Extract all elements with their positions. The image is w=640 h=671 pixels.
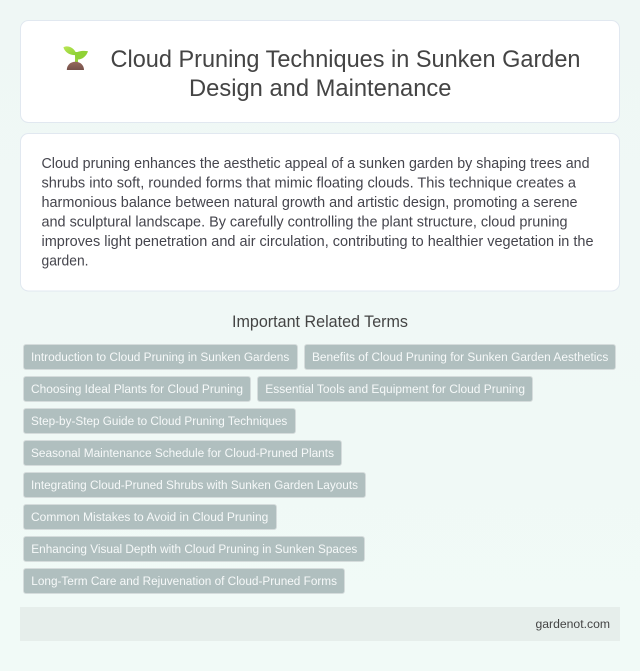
tag: mistakes: Common Mistakes to Avoid in Cloud Pruning	[31, 510, 268, 524]
tag: choosing plants	[24, 376, 250, 402]
footer	[20, 607, 620, 641]
heading: related terms: Important Related Terms	[232, 313, 408, 331]
panel: title card	[20, 20, 620, 122]
tag: visual depth	[24, 536, 364, 562]
tag: choosing plants: Choosing Ideal Plants for Cloud Pruning	[31, 382, 243, 396]
tag: step-by-step	[24, 408, 296, 434]
footer: site name: gardenot.com	[536, 617, 610, 631]
icon: seedling	[63, 46, 88, 70]
title: Design and Maintenance	[189, 75, 452, 102]
tag: benefits	[304, 344, 616, 370]
tag: long-term care	[24, 568, 344, 594]
title	[110, 46, 580, 102]
tag: seasonal: Seasonal Maintenance Schedule for Cloud-Pruned Plants	[31, 446, 334, 460]
tag: seasonal	[24, 440, 342, 466]
text block: description: garden.	[42, 254, 88, 270]
tag: step-by-step: Step-by-Step Guide to Cloud Pruning Techniques	[31, 414, 287, 428]
tag: tools	[258, 376, 532, 402]
title: Cloud Pruning Techniques in Sunken Garden	[110, 46, 580, 73]
tag: visual depth: Enhancing Visual Depth with Cloud Pruning in Sunken Spaces	[31, 542, 357, 556]
text block: description: and sculptural landscape. By carefully controlling the plant structure, cloud pruning	[42, 214, 568, 230]
text block: description: improves light penetration and air circulation, contributing to healthier vegetation in the	[42, 234, 594, 250]
text block: description: Cloud pruning enhances the aesthetic appeal of a sunken garden by shaping trees and	[42, 156, 590, 172]
tag: introduction	[24, 344, 298, 370]
tag: introduction: Introduction to Cloud Pruning in Sunken Gardens	[31, 350, 289, 364]
tag: benefits: Benefits of Cloud Pruning for Sunken Garden Aesthetics	[312, 350, 608, 364]
tag: integrating	[24, 472, 366, 498]
panel: description card	[20, 134, 620, 291]
text block: description	[42, 156, 594, 270]
tag: long-term care: Long-Term Care and Rejuvenation of Cloud-Pruned Forms	[31, 574, 337, 588]
tag: integrating: Integrating Cloud-Pruned Shrubs with Sunken Garden Layouts	[31, 478, 358, 492]
tag: tools: Essential Tools and Equipment for Cloud Pruning	[265, 382, 525, 396]
tag list	[24, 344, 616, 594]
text block: description: shrubs into soft, rounded forms that mimic floating clouds. This technique creates a	[42, 176, 576, 192]
text block: description: harmonious balance between natural growth and artistic design, promoting a serene	[42, 195, 578, 211]
tag: mistakes	[24, 504, 276, 530]
